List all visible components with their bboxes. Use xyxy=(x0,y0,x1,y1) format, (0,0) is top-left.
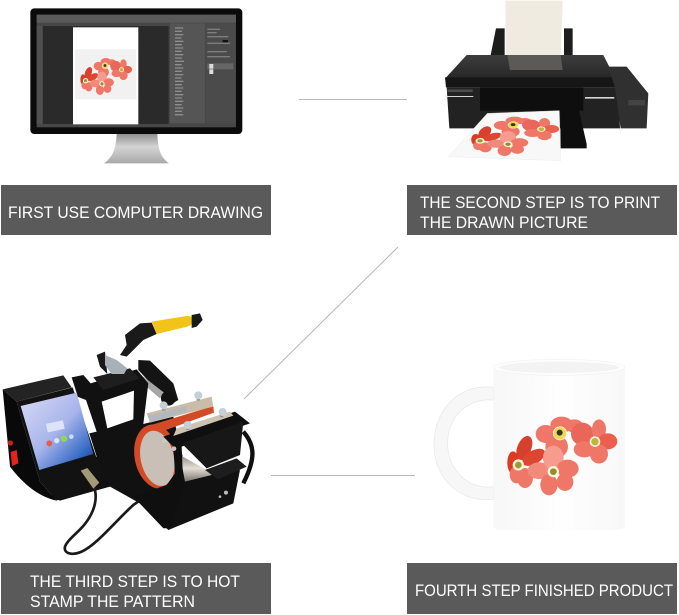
label: step 3: STAMP THE PATTERN xyxy=(30,593,195,611)
handle xyxy=(120,313,203,357)
label: step 3 xyxy=(1,563,271,614)
label: step 2 xyxy=(407,185,677,235)
artboard with flowers xyxy=(73,27,138,124)
mounting plate xyxy=(93,368,140,390)
label: step 4 xyxy=(407,563,677,614)
printer top xyxy=(445,55,615,79)
front panel strips xyxy=(447,96,614,99)
pivot rod xyxy=(137,377,165,398)
frame window xyxy=(102,391,134,428)
red power switch xyxy=(11,450,18,466)
printer body xyxy=(447,87,620,128)
cable connector xyxy=(81,468,99,489)
red fuse button xyxy=(8,440,13,446)
rod knob xyxy=(161,391,176,406)
connector line: step 1 to step 2 xyxy=(299,98,407,100)
label: step 1: FIRST USE COMPUTER DRAWING xyxy=(8,204,263,222)
connector line: step 3 to step 4 xyxy=(271,474,415,476)
panel: computer monitor illustration xyxy=(30,8,242,163)
power cord xyxy=(65,484,172,554)
ink tank xyxy=(608,67,648,128)
monitor stand xyxy=(104,133,169,163)
label: step 1 xyxy=(1,185,271,235)
mug handle xyxy=(434,387,493,500)
mug rim xyxy=(493,359,625,375)
label: step 2: THE SECOND STEP IS TO PRINT xyxy=(420,194,660,212)
steel cylinder xyxy=(180,455,212,482)
panel: mug press illustration xyxy=(3,313,252,554)
loaded paper xyxy=(505,1,563,55)
paper shadow on lid xyxy=(507,55,563,70)
paper guides xyxy=(491,28,573,56)
mug inner xyxy=(499,362,619,373)
printer front band xyxy=(445,77,615,87)
front window xyxy=(480,87,583,111)
panel: finished mug illustration xyxy=(434,359,625,530)
heating element xyxy=(128,406,214,493)
upper clamp bar xyxy=(147,391,213,423)
label: step 3: THE THIRD STEP IS TO HOT xyxy=(30,573,240,591)
touch screen xyxy=(21,393,93,470)
panel: printer illustration xyxy=(445,1,648,161)
monitor bezel xyxy=(30,8,242,134)
hinge bracket xyxy=(97,352,127,374)
front frame xyxy=(133,412,252,528)
rear lever arm xyxy=(138,360,178,405)
flower print xyxy=(507,417,617,495)
top beam and rear plate xyxy=(50,369,240,530)
photoshop screen xyxy=(37,15,236,127)
printed sheet xyxy=(448,111,561,161)
gap beside control box xyxy=(77,397,97,433)
mug body xyxy=(493,368,625,530)
lower clamp bar xyxy=(173,408,233,436)
label: step 2: THE DRAWN PICTURE xyxy=(420,214,588,232)
connector line: step 2 to step 3 xyxy=(244,247,398,399)
control box xyxy=(3,375,102,501)
output tray xyxy=(560,100,587,148)
